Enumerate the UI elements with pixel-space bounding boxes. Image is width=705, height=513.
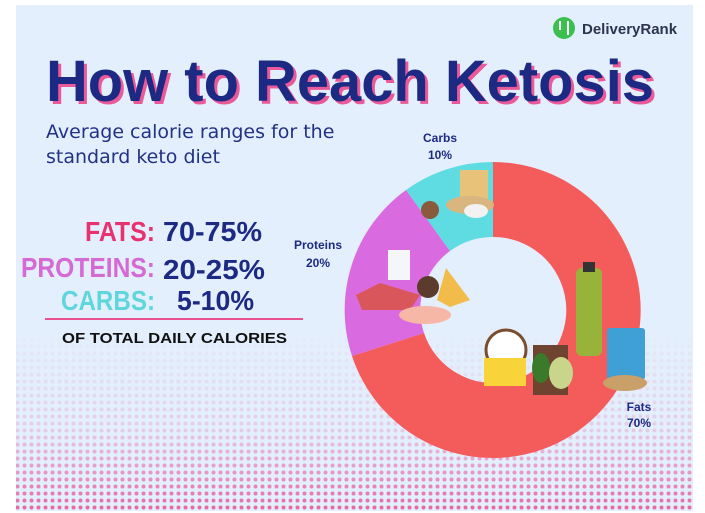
label: fats: 70%: [627, 416, 651, 430]
logo: DeliveryRank: [582, 21, 678, 38]
label: carbs: [423, 131, 457, 162]
macro ranges: [21, 216, 303, 347]
macro ranges: 20-25%: [163, 254, 265, 285]
subtitle: Average calorie ranges for the: [46, 121, 334, 143]
food: carbs: [421, 170, 494, 219]
food: fats: [484, 262, 647, 395]
label: proteins: Proteins: [294, 238, 342, 252]
food: proteins: [356, 250, 470, 324]
label: carbs: 10%: [428, 148, 452, 162]
dotted pattern: [16, 352, 692, 510]
macro ranges: PROTEINS:: [21, 252, 155, 283]
macro ranges: 70-75%: [163, 216, 262, 247]
label: proteins: 20%: [306, 256, 330, 270]
subtitle: standard keto diet: [46, 146, 220, 168]
label: fats: [627, 400, 652, 430]
donut chart: [345, 162, 641, 458]
logo: [553, 17, 678, 39]
title: How to Reach Ketosis: [46, 49, 654, 114]
label: fats: Fats: [627, 400, 652, 414]
macro ranges: FATS:: [85, 216, 155, 247]
macro ranges: 5-10%: [177, 285, 254, 316]
subtitle: [46, 121, 334, 168]
label: proteins: [294, 238, 342, 270]
title: How to Reach Ketosis: [49, 52, 657, 117]
macro ranges: OF TOTAL DAILY CALORIES: [62, 330, 287, 347]
label: carbs: Carbs: [423, 131, 457, 145]
macro ranges: CARBS:: [61, 285, 155, 316]
